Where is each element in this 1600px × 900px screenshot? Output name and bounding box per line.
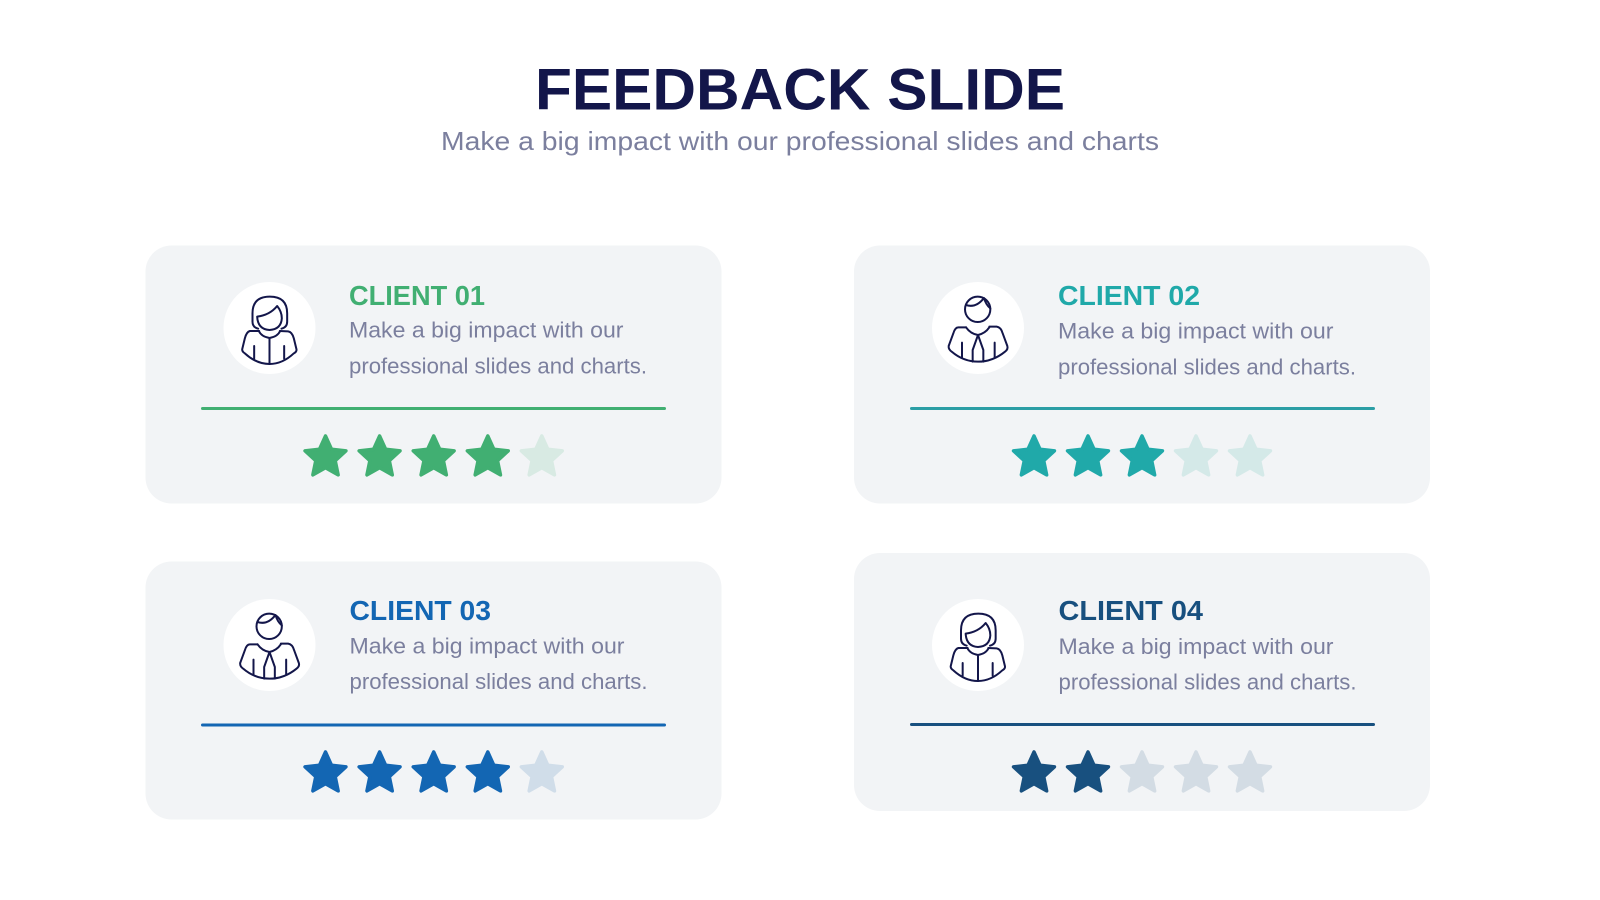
client text [1058,634,1356,694]
client text: professional slides and charts. [1058,670,1356,694]
client name: CLIENT 03 [350,595,491,626]
client text: professional slides and charts. [1058,354,1356,380]
star rating: 3 of 5 [1014,436,1270,475]
star rating: 2 of 5 [1014,752,1270,791]
client name: CLIENT 02 [1058,280,1200,311]
panel: client 02 [854,246,1430,504]
star rating: 4 of 5 [305,436,562,475]
icon: man avatar [224,599,316,691]
star rating: 4 of 5 [305,752,562,791]
client text [1058,318,1356,380]
panel: client 04 [854,553,1430,811]
client text: Make a big impact with our [349,318,624,342]
client text: Make a big impact with our [1058,318,1334,344]
client text: professional slides and charts. [350,669,648,694]
panel: client 01 [146,246,722,504]
icon: man avatar [932,282,1024,374]
client text [350,634,648,694]
icon: woman avatar [224,282,316,374]
icon: woman avatar [932,599,1024,691]
subtitle: Make a big impact with our professional slides and charts [441,126,1159,156]
panel: client 03 [146,562,722,820]
client text: Make a big impact with our [1058,634,1334,659]
client text [349,318,647,378]
client text: professional slides and charts. [349,354,647,378]
client name: CLIENT 04 [1058,595,1203,626]
client text: Make a big impact with our [350,634,624,658]
title: FEEDBACK SLIDE [535,58,1065,122]
client name: CLIENT 01 [349,280,485,311]
